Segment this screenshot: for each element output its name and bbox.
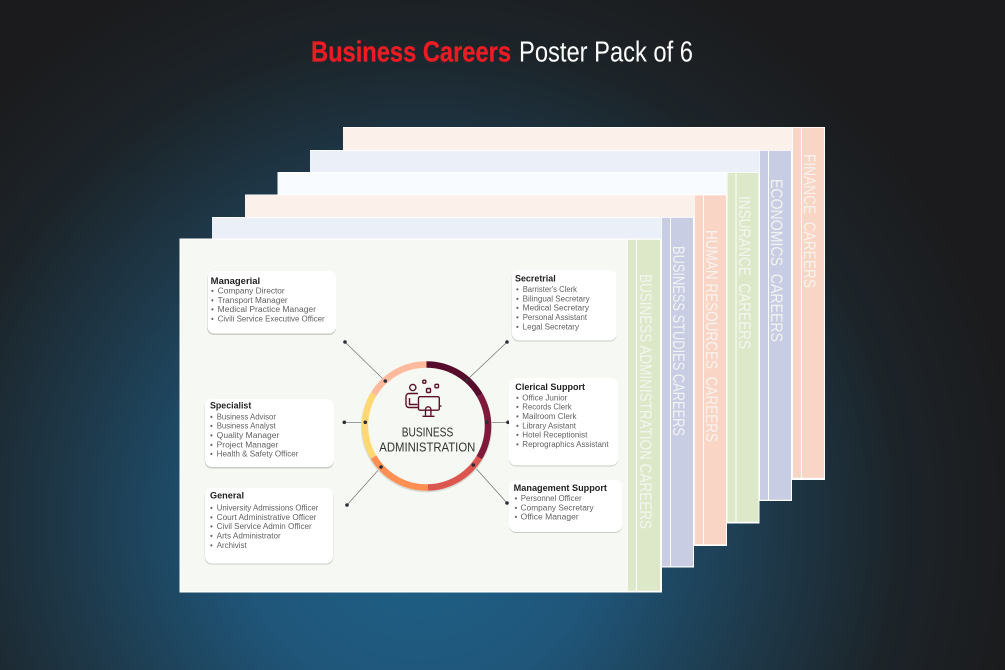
poster: insurance careers xyxy=(278,172,760,524)
card: secretrial: • xyxy=(516,322,519,331)
card: general: • xyxy=(210,541,213,550)
card: clerical support: • xyxy=(516,393,519,402)
label: business studies careers: BUSINESS STUDIES CAREERS xyxy=(669,246,687,436)
card: clerical support: Hotel Receptionist xyxy=(522,431,588,440)
card: secretrial: Bilingual Secretary xyxy=(523,294,590,303)
card: clerical support: • xyxy=(516,412,519,421)
card: managerial: Civili Service Executive Officer xyxy=(218,314,325,324)
connector dots xyxy=(342,340,510,507)
card: specialist: Business Analyst xyxy=(217,422,276,431)
card: specialist: Project Manager xyxy=(217,440,279,449)
card: managerial: Managerial xyxy=(211,276,260,286)
label: insurance careers: INSURANCE CAREERS xyxy=(735,196,753,349)
ring label xyxy=(379,424,475,454)
card: management support: Personnel Officer xyxy=(521,494,582,503)
card: management support: • xyxy=(514,494,518,503)
card: specialist: • xyxy=(210,431,213,440)
card: specialist: Business Advisor xyxy=(217,412,276,421)
card: clerical support: Clerical Support xyxy=(515,382,585,392)
poster: human resources careers xyxy=(245,194,727,546)
card: managerial: Transport Manager xyxy=(218,296,288,305)
card: management support: Company Secretary xyxy=(521,503,594,512)
title: Business Careers xyxy=(311,36,511,68)
poster: business administration careers xyxy=(180,238,662,592)
card: secretrial: • xyxy=(516,294,519,303)
label: finance careers: FINANCE CAREERS xyxy=(800,154,818,288)
poster: finance careers xyxy=(343,127,825,480)
card: clerical support xyxy=(509,378,618,466)
card: managerial xyxy=(207,271,336,335)
label: business administration careers: BUSINESS ADMINISTRATION CAREERS xyxy=(636,274,654,529)
card: managerial: • xyxy=(211,296,214,305)
card: secretrial: Personal Assistant xyxy=(523,313,588,322)
card: clerical support: Library Asistant xyxy=(522,421,577,430)
card: general: • xyxy=(210,504,213,512)
card: clerical support: • xyxy=(516,440,519,449)
card: management support: Office Manager xyxy=(521,513,579,522)
card: secretrial: Medical Secretary xyxy=(523,304,589,313)
card: general xyxy=(205,488,333,564)
card: specialist: Quality Manager xyxy=(217,431,280,440)
card: specialist: • xyxy=(210,412,213,421)
card: general: Arts Administrator xyxy=(217,532,281,540)
card: general: Court Administrative Officer xyxy=(217,513,317,522)
label: economics careers: ECONOMICS CAREERS xyxy=(767,179,785,342)
card: clerical support: • xyxy=(516,421,519,430)
card: secretrial: • xyxy=(516,285,519,294)
card: specialist: • xyxy=(210,422,213,431)
card: clerical support: Records Clerk xyxy=(522,403,573,412)
card: clerical support: • xyxy=(516,403,519,412)
card: clerical support: • xyxy=(516,431,519,440)
card: general: Civil Service Admin Officer xyxy=(217,522,312,531)
card: general: • xyxy=(210,513,213,522)
card: secretrial: Legal Secretary xyxy=(523,322,579,331)
card: secretrial: • xyxy=(516,313,519,322)
card: managerial: • xyxy=(211,286,214,296)
title xyxy=(311,36,693,68)
card: general: • xyxy=(210,522,213,531)
card: secretrial: Barrister's Clerk xyxy=(523,285,578,294)
card: specialist xyxy=(205,399,334,468)
card: general: University Admissions Officer xyxy=(217,504,319,512)
ring label: BUSINESS xyxy=(402,424,454,440)
card: management support: Management Support xyxy=(514,483,607,493)
card: managerial: • xyxy=(211,314,214,324)
card: secretrial: • xyxy=(516,304,519,313)
card: management support: • xyxy=(514,513,518,522)
card: management support: • xyxy=(514,503,518,512)
poster: business studies careers xyxy=(212,217,694,568)
card: managerial: Medical Practice Manager xyxy=(218,305,316,314)
card: clerical support: Reprographics Assistant xyxy=(522,440,609,449)
label: human resources careers: HUMAN RESOURCES CAREERS xyxy=(702,230,720,442)
card: clerical support: Office Junior xyxy=(522,393,568,402)
card: management support xyxy=(509,480,622,533)
icon: person at computer xyxy=(406,380,442,416)
card: general: Archivist xyxy=(217,541,247,550)
card: general: • xyxy=(210,532,213,540)
card: secretrial: Secretrial xyxy=(515,274,556,284)
card: specialist: Specialist xyxy=(210,401,251,411)
card: specialist: • xyxy=(210,450,213,459)
card: general: General xyxy=(210,491,244,501)
card: managerial: • xyxy=(211,305,214,314)
card: clerical support: Mailroom Clerk xyxy=(522,412,578,421)
ring diagram xyxy=(342,340,510,507)
title: Poster Pack of 6 xyxy=(519,36,693,68)
ring label: ADMINISTRATION xyxy=(379,440,475,454)
card: specialist: Health & Safety Officer xyxy=(217,450,299,459)
connectors xyxy=(344,342,508,505)
card: secretrial xyxy=(512,270,617,342)
card: specialist: • xyxy=(210,440,213,449)
card: managerial: Company Director xyxy=(218,286,285,296)
poster: economics careers xyxy=(310,150,792,501)
